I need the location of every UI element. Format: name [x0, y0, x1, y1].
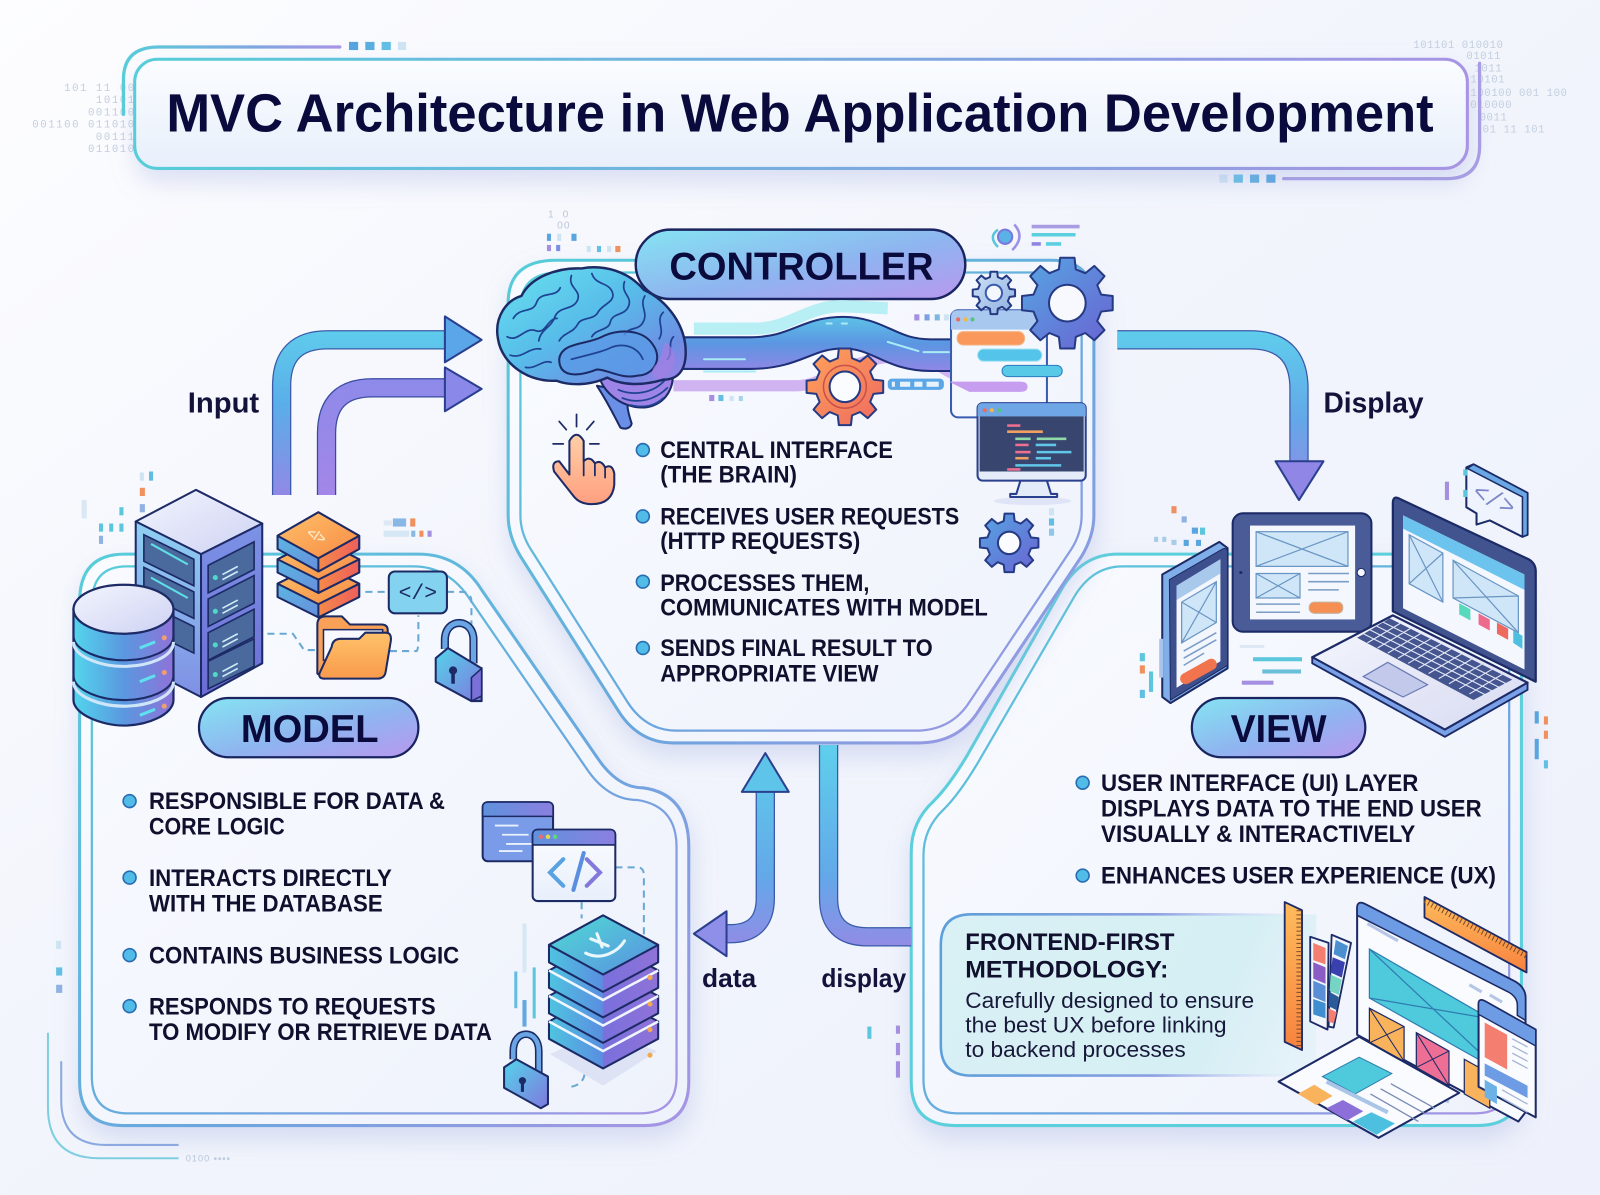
binary decoration right: 01 11 101 — [1483, 125, 1545, 137]
bullet 3 — [636, 570, 988, 621]
model heading pill — [199, 698, 418, 757]
icon: top gears — [973, 258, 1113, 348]
icon: folder — [317, 616, 391, 679]
gear: big blue — [1022, 258, 1113, 348]
deco bars model lower — [56, 924, 536, 1027]
arrow: input outer — [282, 316, 482, 495]
keyboard — [1357, 618, 1512, 700]
bullet 3: CONTAINS BUSINESS LOGIC — [149, 942, 459, 969]
panel: view — [911, 554, 1521, 1126]
icon: padlock — [436, 623, 482, 701]
callout body — [965, 988, 1254, 1062]
bullet 3: COMMUNICATES WITH MODEL — [660, 594, 988, 621]
callout: frontend-first methodology — [941, 914, 1316, 1076]
bullet 1: CENTRAL INTERFACE — [660, 437, 893, 464]
callout heading: METHODOLOGY: — [965, 957, 1168, 984]
binary decoration left: 101 11 00 — [64, 83, 136, 95]
callout heading — [965, 929, 1175, 984]
icon: clicking hand — [553, 414, 614, 504]
bullet 1: CORE LOGIC — [149, 814, 285, 841]
layer 1 — [549, 915, 658, 992]
layer top — [278, 512, 359, 571]
gear: small pale — [973, 272, 1015, 314]
bullet 1: RESPONSIBLE FOR DATA & — [149, 788, 445, 815]
bullet 1: (THE BRAIN) — [660, 462, 797, 489]
icon: database stack — [549, 915, 658, 1086]
bullet 4: RESPONDS TO REQUESTS — [149, 993, 436, 1020]
icon: server tower — [136, 490, 262, 697]
icon: brain — [497, 267, 686, 429]
bullet 2: ENHANCES USER EXPERIENCE (UX) — [1101, 863, 1496, 890]
deco lines bottom left — [48, 1033, 231, 1163]
icon: phone wireframe — [1162, 542, 1228, 703]
label: display: Display — [1323, 387, 1424, 419]
icon: database cylinder — [73, 585, 173, 726]
icon: code monitor — [978, 403, 1086, 505]
binary decoration right: 1011 — [1474, 63, 1502, 75]
arrow: display between controller and view — [829, 745, 911, 937]
bullet 4: SENDS FINAL RESULT TO — [660, 635, 933, 662]
panel: model — [80, 554, 689, 1126]
panel: controller — [508, 260, 1094, 743]
deco squares view — [867, 469, 1548, 1078]
icon: model connectors lower — [571, 867, 644, 1087]
view heading pill: VIEW — [1231, 708, 1327, 751]
layer 3 — [549, 966, 658, 1043]
icon: orange server stack — [278, 512, 359, 617]
label: input: Input — [188, 387, 260, 419]
bullet 1: USER INTERFACE (UI) LAYER — [1101, 770, 1418, 797]
binary decoration right — [1413, 40, 1567, 137]
bullet 2: RECEIVES USER REQUESTS — [660, 504, 959, 531]
binary decoration right: 100100 001 100 — [1470, 88, 1567, 100]
icon: back code window — [483, 802, 553, 861]
callout body: Carefully designed to ensure — [965, 988, 1254, 1013]
layer bottom — [278, 563, 359, 617]
ruler vertical — [1285, 902, 1302, 1050]
binary decoration left: 00111 — [96, 132, 136, 144]
icon: code speech bubble: </> — [1467, 480, 1519, 523]
binary decoration left — [32, 83, 136, 156]
icon: design tools and wireframes — [1279, 897, 1536, 1138]
view heading pill — [1192, 698, 1365, 757]
icon: lower padlock — [504, 1034, 548, 1108]
bullet 1 — [636, 437, 893, 489]
icon: tablet wireframe — [1233, 513, 1371, 632]
swatches — [1310, 935, 1351, 1030]
bullet 2: INTERACTS DIRECTLY — [149, 865, 392, 892]
controller heading pill: CONTROLLER — [669, 246, 934, 289]
arrow: data between model and controller — [694, 753, 789, 956]
paper layout — [1279, 1037, 1459, 1138]
title text: MVC Architecture in Web Application Development — [166, 84, 1434, 144]
gear: orange — [807, 348, 883, 425]
icon: ribbons to screen — [673, 306, 1026, 387]
icon: code box — [389, 571, 447, 613]
binary decoration left: 001100 — [88, 107, 136, 119]
binary decoration left: 011010 — [88, 144, 136, 156]
small browser — [1479, 1000, 1536, 1117]
label: data: data — [702, 965, 757, 993]
bullet 4: APPROPRIATE VIEW — [660, 661, 879, 688]
binary decoration right: 010000 — [1470, 100, 1512, 112]
icon: model connectors — [267, 592, 471, 651]
bullet 1 — [123, 788, 445, 841]
big browser — [1357, 903, 1526, 1121]
bullet 4: TO MODIFY OR RETRIEVE DATA — [149, 1019, 492, 1046]
bullet 1: DISPLAYS DATA TO THE END USER — [1101, 795, 1482, 822]
model bullet list — [123, 788, 492, 1046]
label: display small: display — [821, 965, 907, 993]
bullet 4 — [636, 635, 933, 688]
bullet 4 — [123, 993, 492, 1046]
bullet 1 — [1076, 770, 1482, 848]
bullet 3: PROCESSES THEM, — [660, 570, 869, 597]
gear: blue lower — [980, 514, 1038, 572]
bullet 2 — [123, 865, 392, 917]
bullet 2 — [636, 504, 959, 555]
model heading pill: MODEL — [241, 708, 379, 751]
binary decoration right: 0011 — [1480, 112, 1507, 124]
layer 4 — [549, 992, 658, 1068]
deco squares controller: 1 0 — [548, 209, 571, 220]
arrow: input inner — [327, 367, 482, 495]
deco squares model — [82, 471, 432, 544]
binary decoration left: 001100 011010 — [32, 120, 136, 132]
layer 2 — [549, 941, 658, 1017]
title banner — [135, 59, 1467, 168]
controller bullet list — [636, 437, 988, 688]
deco squares controller: 00 — [557, 221, 571, 232]
bullet 2: (HTTP REQUESTS) — [660, 528, 860, 555]
icon: front code window — [533, 830, 615, 901]
deco squares controller — [547, 209, 1054, 536]
icon: laptop — [1312, 498, 1536, 737]
controller heading pill — [636, 230, 965, 299]
icon: code speech bubble — [1466, 464, 1528, 537]
bullet 2: WITH THE DATABASE — [149, 890, 383, 917]
callout body: the best UX before linking — [965, 1013, 1227, 1038]
icon: code box: </> — [399, 582, 437, 606]
server front slots — [144, 535, 254, 689]
callout body: to backend processes — [965, 1037, 1186, 1062]
deco lines bottom left: 0100 ▪▪▪▪ — [186, 1153, 231, 1163]
binary decoration right: 101101 010010 — [1413, 40, 1503, 52]
binary decoration left: 10101 — [96, 95, 136, 107]
title frame accents — [123, 42, 1480, 183]
icon: controller browser window — [888, 310, 1062, 417]
icon: orange server stack: </> — [305, 525, 329, 547]
binary decoration right: 01011 — [1466, 51, 1501, 63]
layer middle — [278, 539, 359, 593]
ruler diagonal — [1424, 897, 1527, 972]
view bullet list — [1076, 770, 1496, 890]
arrow: display to view — [1117, 340, 1323, 500]
bullet 1: VISUALLY & INTERACTIVELY — [1101, 821, 1415, 848]
callout heading: FRONTEND-FIRST — [965, 929, 1175, 956]
icon: signal and lines top right — [993, 225, 1080, 250]
binary decoration right: 10101 — [1470, 75, 1505, 87]
